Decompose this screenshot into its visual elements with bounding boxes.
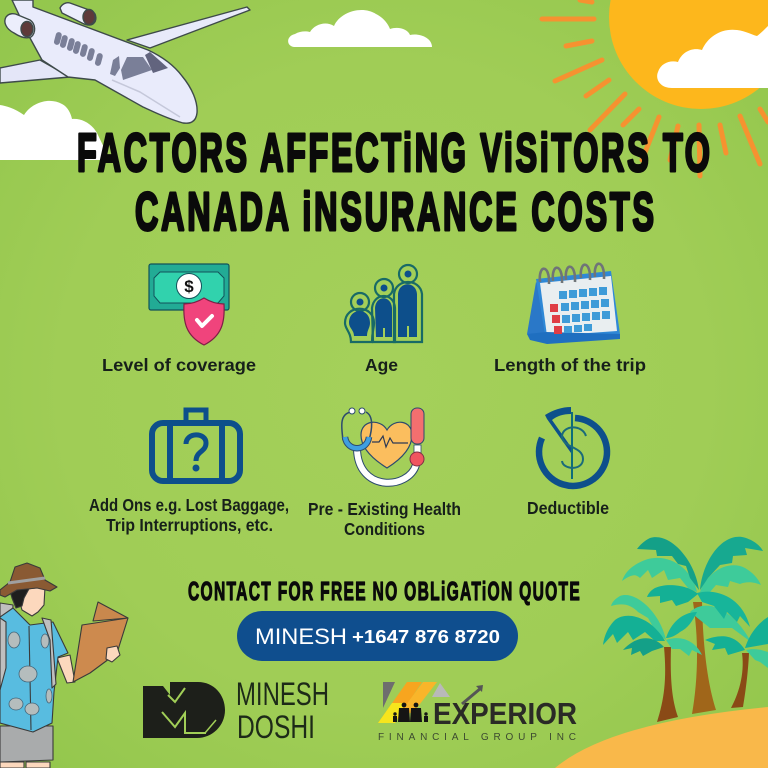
- title: [77, 124, 710, 242]
- icon: desk calendar: [527, 264, 620, 344]
- phone button: [237, 611, 518, 661]
- icon: money and shield: $: [184, 277, 194, 296]
- label: Add Ons e.g. Lost Baggage,: [89, 495, 289, 515]
- title: CANADA iNSURANCE COSTS: [135, 183, 654, 242]
- name: MINESH: [236, 676, 329, 712]
- contact heading: CONTACT FOR FREE NO OBLiGATiON QUOTE: [188, 577, 580, 606]
- title: FACTORS AFFECTiNG ViSiTORS TO: [77, 124, 710, 183]
- factor: add ons: [89, 410, 289, 535]
- palm trees: [603, 537, 768, 722]
- label: Level of coverage: [102, 355, 256, 375]
- label: Length of the trip: [494, 355, 646, 375]
- traveller figure: [0, 563, 128, 768]
- logo: Minesh Doshi: [143, 676, 329, 745]
- factor: age: [345, 265, 422, 375]
- logo: Experior: [378, 682, 577, 743]
- label: Trip Interruptions, etc.: [106, 515, 273, 535]
- icon: money and shield: [149, 264, 229, 345]
- MD monogram: [143, 682, 225, 738]
- phone button: +1647 876 8720: [352, 627, 500, 647]
- phone button: MINESH: [255, 624, 347, 649]
- sun with rays: [542, 0, 768, 176]
- label: Deductible: [527, 498, 609, 518]
- sand: [555, 707, 768, 768]
- tagline: FINANCIAL GROUP INC: [378, 732, 576, 743]
- label: Pre - Existing Health: [308, 499, 461, 519]
- icon: three figures: [345, 265, 422, 342]
- cloud: top centre: [288, 10, 432, 47]
- label: [308, 499, 461, 539]
- factor: level of coverage: [102, 264, 256, 375]
- label: Conditions: [344, 519, 425, 539]
- icon: dollar dial: [539, 407, 607, 486]
- cloud: over sun: [657, 26, 768, 88]
- label: [89, 495, 289, 535]
- factor: deductible: [527, 407, 609, 518]
- icon: heart, stethoscope, exclamation: [342, 408, 424, 483]
- wordmark: EXPERIOR: [433, 696, 577, 731]
- label: Age: [365, 355, 398, 375]
- factor: length of the trip: [494, 264, 646, 375]
- emblem: [378, 682, 483, 723]
- name: [236, 676, 329, 745]
- airplane: [0, 0, 250, 123]
- name: DOSHI: [237, 709, 315, 745]
- icon: suitcase with question mark: [152, 410, 240, 481]
- cloud: left: [0, 101, 110, 160]
- factor: pre-existing health conditions: [308, 408, 461, 539]
